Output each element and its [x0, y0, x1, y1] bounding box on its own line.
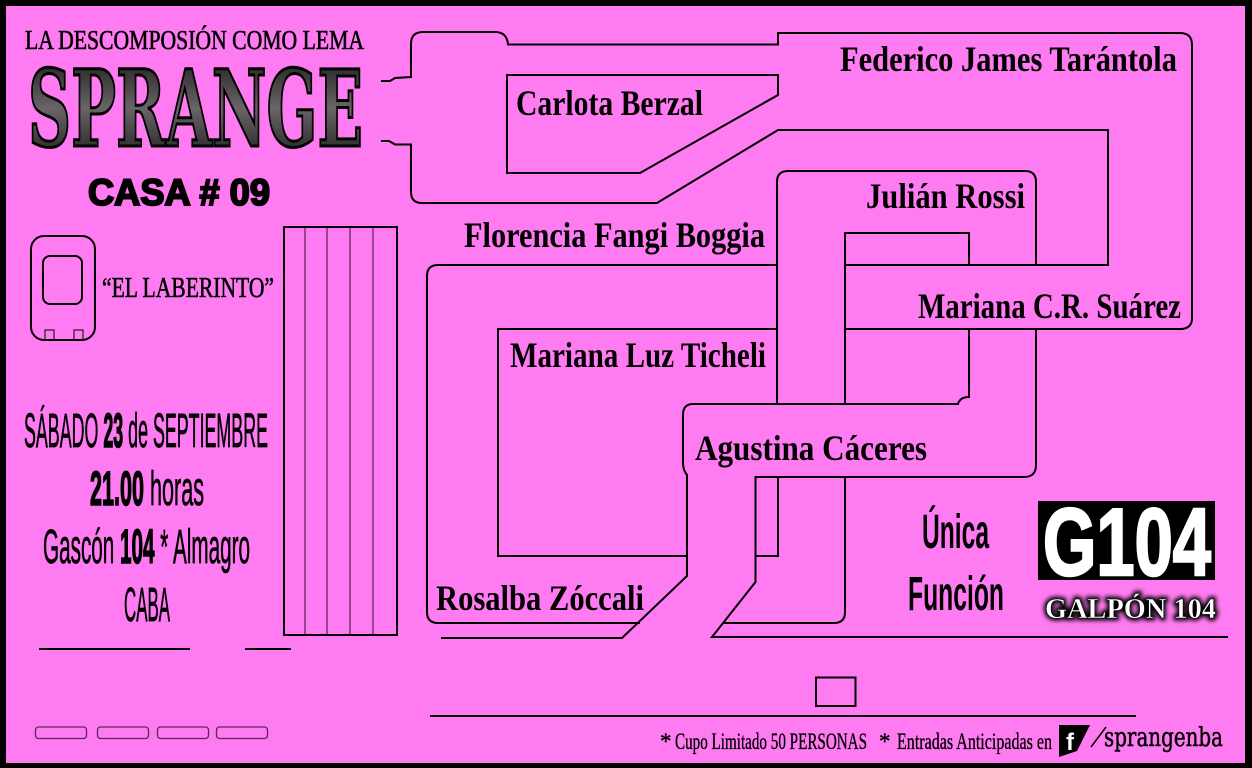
title: SPRANGE: SPRANGE	[28, 46, 363, 171]
left rules	[39, 648, 291, 650]
text: Única Función	[908, 504, 1004, 621]
name: Florencia Fangi Boggia: Florencia Fangi Boggia	[464, 215, 765, 255]
footer: ticket info: *	[660, 729, 672, 754]
footer: ticket info: Cupo Limitado 50 PERSONAS	[675, 729, 867, 754]
name: Agustina Cáceres: Agustina Cáceres	[695, 428, 927, 468]
maze floor plan	[381, 32, 1228, 638]
event details: Gascón 104 * Almagro	[43, 521, 250, 574]
icon: facebook	[1059, 725, 1090, 757]
event details: 21.00 horas	[90, 463, 204, 516]
subtitle: CASA # 09: CASA # 09	[88, 172, 270, 213]
label: El Laberinto: “EL LABERINTO”	[102, 272, 274, 304]
text: Única Función: Única	[922, 504, 989, 559]
logo: Galpón 104: GALPÓN 104	[1045, 592, 1216, 625]
footer rule	[430, 715, 1136, 717]
header tagline: LA DESCOMPOSIÓN COMO LEMA	[25, 25, 364, 55]
icon: map symbol	[31, 236, 95, 340]
name: Carlota Berzal: Carlota Berzal	[516, 83, 703, 123]
footer: ticket info: Entradas Anticipadas en	[897, 729, 1052, 754]
name: Rosalba Zóccali: Rosalba Zóccali	[436, 578, 644, 618]
poster: SÁBADO 23 de SEPTIEMBRE	[24, 405, 268, 458]
event details	[24, 405, 268, 632]
logo: Galpón 104: GALPÓN 104	[1045, 592, 1216, 625]
four small rounded boxes	[36, 727, 268, 738]
striped column	[284, 227, 397, 635]
text: Única Función: Función	[908, 568, 1004, 621]
name: Mariana Luz Ticheli: Mariana Luz Ticheli	[510, 335, 766, 375]
icon: facebook: f	[1066, 729, 1075, 756]
event details: CABA	[124, 579, 170, 632]
footer: ticket info: *	[879, 729, 890, 754]
name: Julián Rossi: Julián Rossi	[866, 176, 1025, 216]
name: Federico James Tarántola: Federico James Tarántola	[840, 39, 1177, 79]
name: Mariana C.R. Suárez: Mariana C.R. Suárez	[918, 286, 1181, 326]
small rectangle	[816, 678, 856, 706]
